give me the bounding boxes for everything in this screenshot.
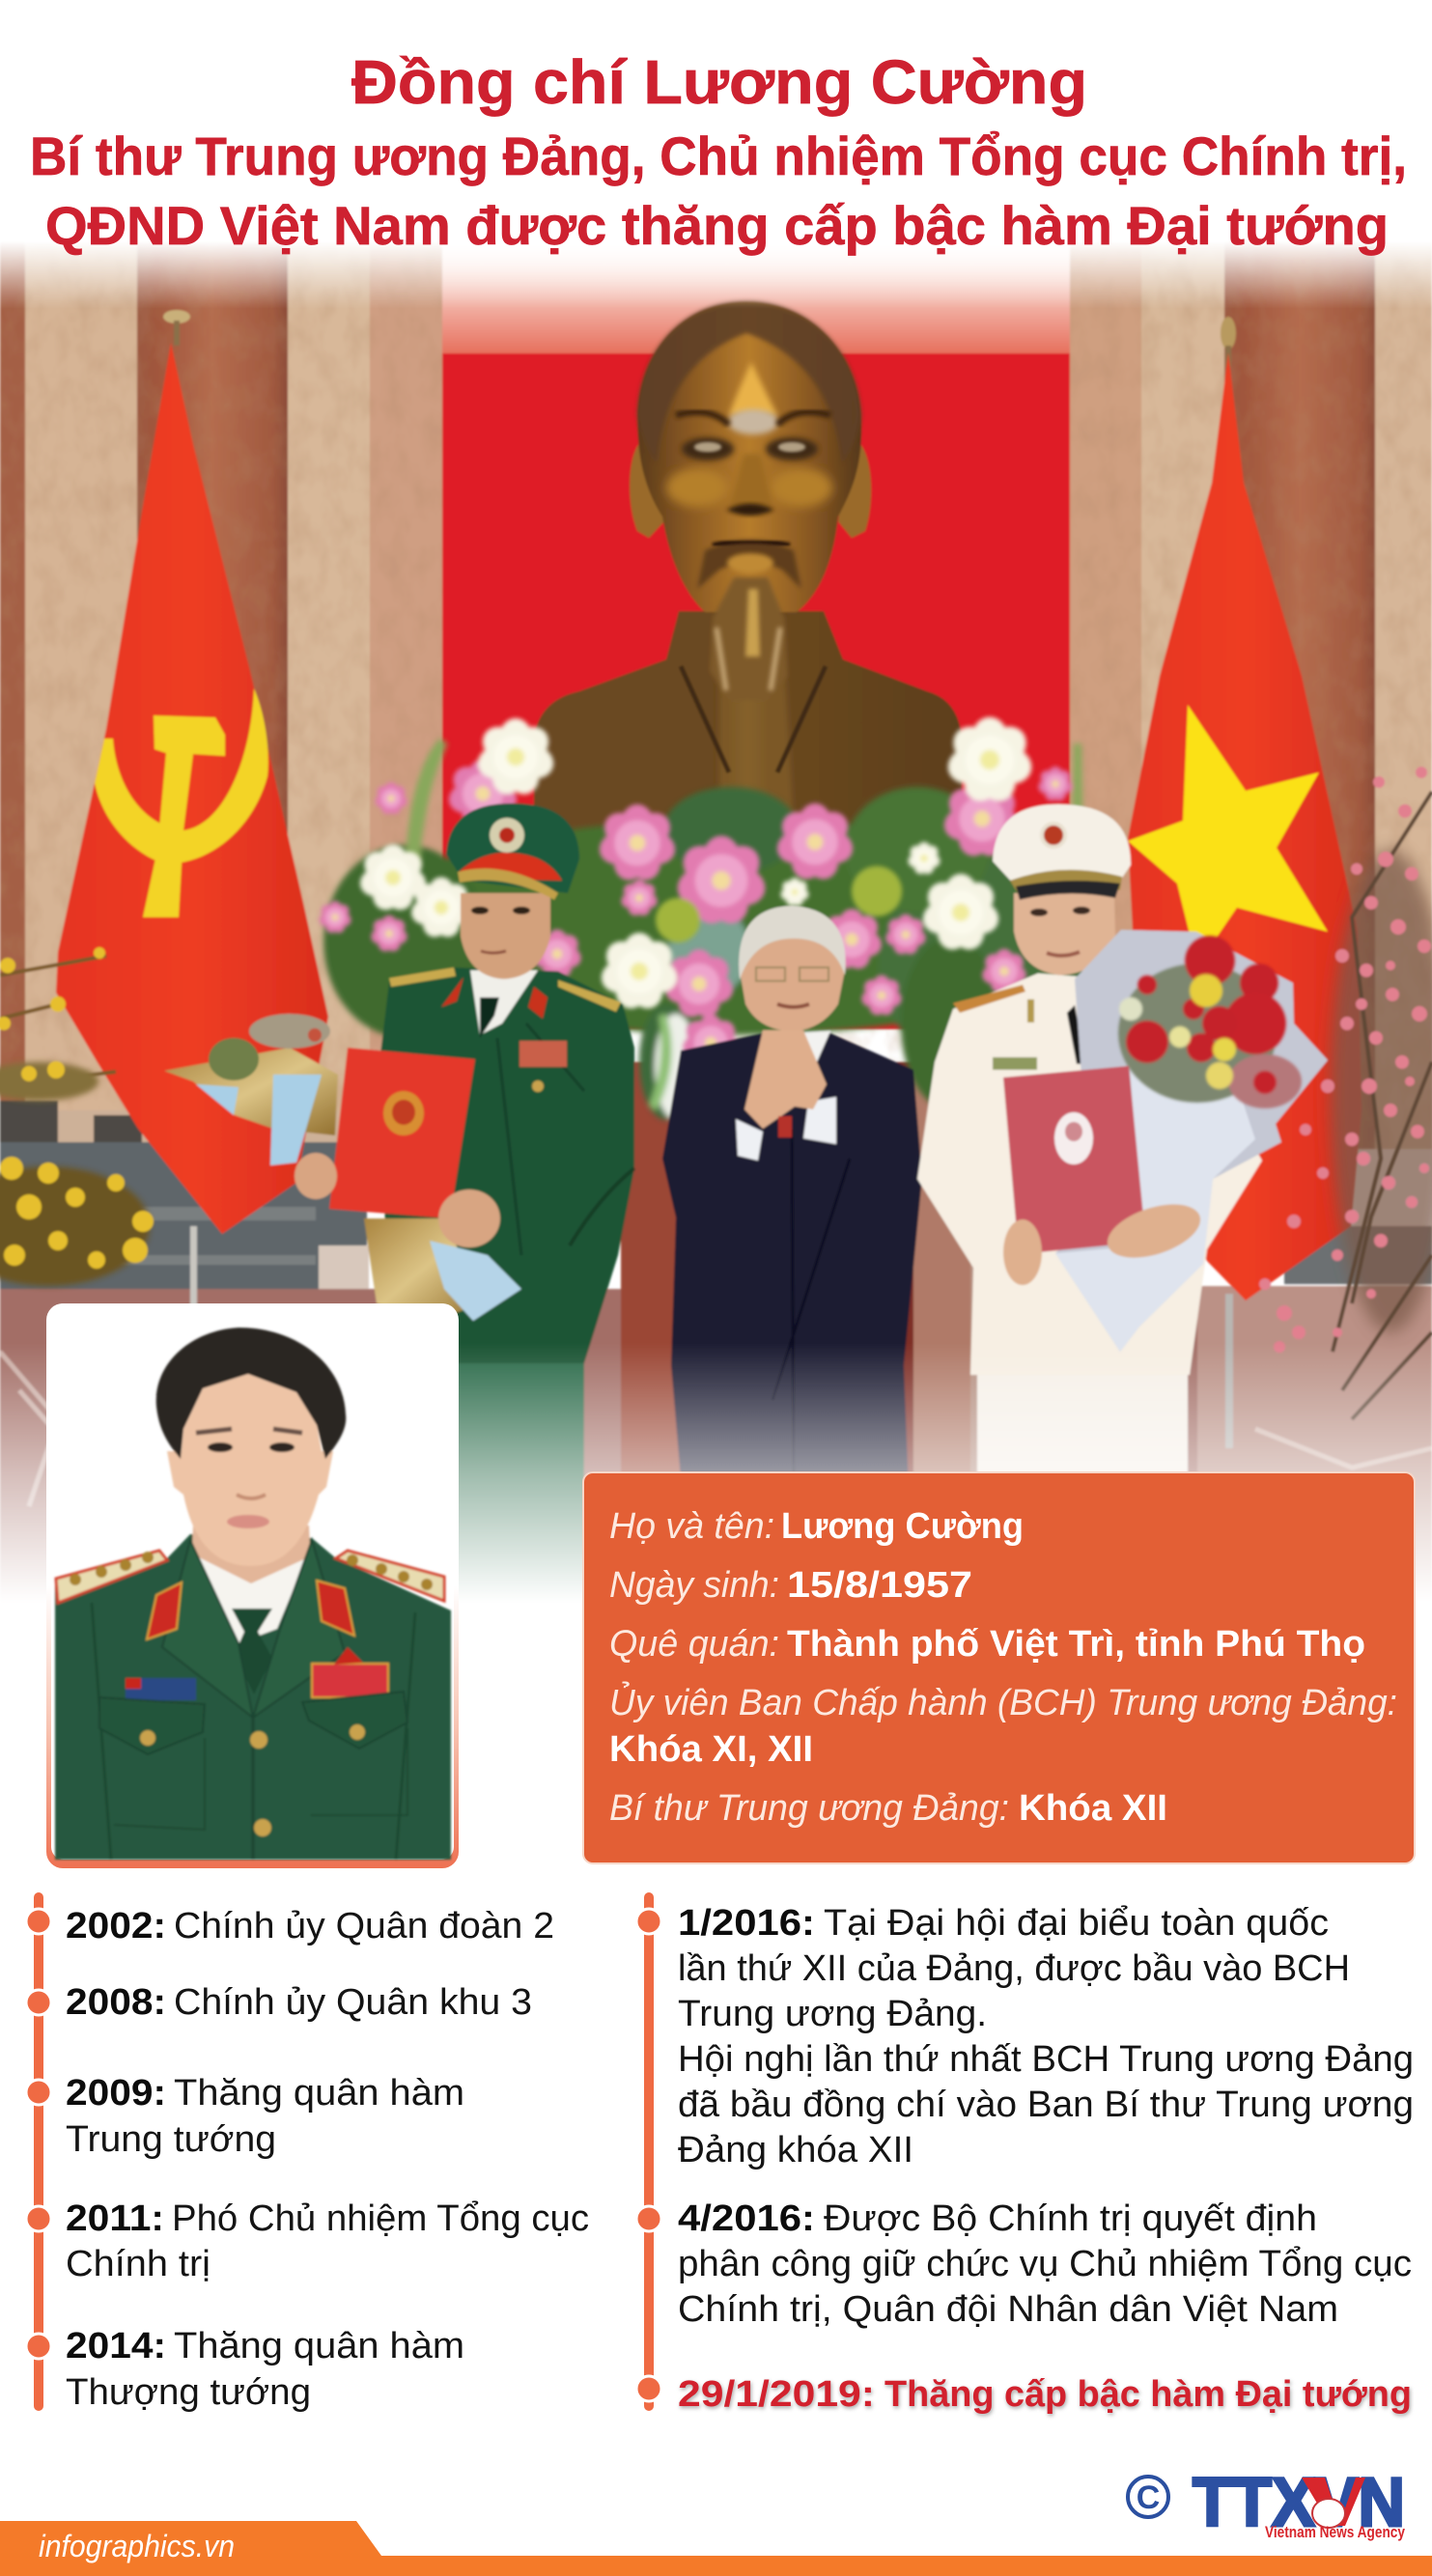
- bronze bust of Ho Chi Minh: [534, 301, 962, 966]
- flag star: [1128, 705, 1328, 966]
- timeline rail: [26, 1892, 51, 2411]
- hammer and sickle: [95, 688, 268, 917]
- portrait of Luong Cuong: [55, 1328, 451, 1860]
- April 2016: phân công giữ chức vụ Chủ nhiệm Tổng cục: [678, 2244, 1412, 2284]
- foliage: [323, 739, 1106, 1120]
- 2009: Trung tướng: [66, 2119, 276, 2160]
- central committee: [609, 1680, 1397, 1770]
- January 2016: Đảng khóa XII: [678, 2130, 913, 2170]
- bottom photo fade: [0, 1342, 1432, 1603]
- general hands: [438, 1190, 500, 1247]
- bouquet paper: [1055, 930, 1328, 1352]
- title: [30, 47, 1407, 256]
- birth date: Ngày sinh:: [609, 1565, 779, 1606]
- hometown: Quê quán:: [609, 1624, 779, 1665]
- general in green uniform: [164, 803, 634, 1603]
- hands: [1101, 1194, 1207, 1268]
- mustache and mouth: [697, 540, 801, 589]
- white jacket: [917, 973, 1262, 1375]
- lotus flowers: [318, 717, 1074, 1074]
- January 2016: Tại Đại hội đại biểu toàn quốc: [824, 1903, 1329, 1944]
- flower arrangement: [318, 717, 1106, 1120]
- red collar tabs: [147, 1582, 182, 1639]
- 2014: Thăng quân hàm: [174, 2326, 464, 2366]
- party flag: [56, 310, 328, 1371]
- TTXVN logo: TTXVN: [1193, 2465, 1405, 2541]
- apricot blossoms left: [0, 947, 154, 1286]
- April 2016: Được Bộ Chính trị quyết định: [824, 2198, 1317, 2239]
- epaulets: [56, 1551, 167, 1603]
- 2009: [66, 2073, 464, 2160]
- brass buttons: [140, 1724, 365, 1836]
- marble texture: [0, 232, 1432, 1149]
- 2011: Phó Chủ nhiệm Tổng cục: [172, 2198, 589, 2239]
- title: Đồng chí Lương Cường: [351, 47, 1087, 117]
- central committee: Khóa XI, XII: [609, 1729, 813, 1770]
- January 2016: Trung ương Đảng.: [678, 1994, 987, 2034]
- January 2019 highlight: 29/1/2019:: [678, 2374, 875, 2415]
- top photo fade: [0, 217, 1432, 309]
- right timeline: [636, 1892, 1414, 2415]
- secretariat: Khóa XII: [1019, 1788, 1167, 1829]
- January 2016: 1/2016:: [678, 1903, 815, 1944]
- ribbon bar and button: [519, 1041, 567, 1067]
- 2011: Chính trị: [66, 2244, 211, 2284]
- army cap: [446, 803, 579, 893]
- red and yellow bouquet flowers: [1118, 936, 1302, 1108]
- uniform: [55, 1534, 451, 1860]
- January 2016: [678, 1903, 1414, 2170]
- neck and face: [191, 1526, 311, 1622]
- 2009: 2009:: [66, 2073, 166, 2114]
- clapping hands: [744, 1030, 827, 1129]
- marble columns right: [1070, 232, 1432, 1149]
- 2008: Chính ủy Quân khu 3: [174, 1982, 532, 2023]
- footer bar: infographics.vn: [39, 2529, 235, 2563]
- trousers: [454, 1352, 584, 1603]
- 2014: 2014:: [66, 2326, 166, 2366]
- 2002: Chính ủy Quân đoàn 2: [174, 1906, 554, 1946]
- 2011: [66, 2198, 589, 2284]
- pink certificate: [1003, 1066, 1145, 1254]
- white shirt cuffs: [736, 1119, 763, 1161]
- January 2019 highlight: Thăng cấp bậc hàm Đại tướng: [884, 2374, 1412, 2415]
- red wall behind bust: [442, 232, 1070, 1029]
- shirt and tie: [470, 970, 538, 1035]
- name: Họ và tên:: [609, 1506, 774, 1547]
- April 2016: 4/2016:: [678, 2198, 815, 2239]
- April 2016: [678, 2198, 1412, 2330]
- secretariat: Bí thư Trung ương Đảng:: [609, 1788, 1009, 1829]
- ribbons, name tag, badge: [312, 1664, 388, 1697]
- copyright mark: [1128, 2477, 1168, 2517]
- footer bar: [0, 2521, 1432, 2576]
- 2014: [66, 2326, 464, 2413]
- name: [609, 1506, 1024, 1547]
- name: Lương Cường: [781, 1506, 1024, 1547]
- 2008: 2008:: [66, 1982, 166, 2023]
- peach blossoms right: [1259, 767, 1432, 1419]
- shirt and tie: [193, 1554, 306, 1643]
- 2014: Thượng tướng: [66, 2372, 311, 2413]
- birth date: [609, 1565, 972, 1606]
- eyes, nose, mouth: [208, 1442, 233, 1452]
- hair: [156, 1328, 346, 1459]
- lapels: [162, 1540, 253, 1718]
- central leader in dark suit: [662, 906, 922, 1482]
- April 2016: Chính trị, Quân đội Nhân dân Việt Nam: [678, 2289, 1338, 2330]
- left timeline: [26, 1892, 589, 2413]
- white hair head: [740, 908, 845, 1031]
- face: [1014, 893, 1115, 975]
- copyright mark: C: [1137, 2479, 1160, 2516]
- trousers: [977, 1361, 1188, 1603]
- 2011: 2011:: [66, 2198, 164, 2239]
- red certificate: [329, 1048, 475, 1218]
- 2002: 2002:: [66, 1906, 166, 1946]
- ceremony photo scene: [0, 232, 1432, 1617]
- hometown: Thành phố Việt Trì, tỉnh Phú Thọ: [787, 1624, 1365, 1665]
- Vietnam national flag: [1128, 317, 1362, 1448]
- bust ears: [630, 441, 664, 538]
- lower stone base and marble floor: [0, 1062, 1432, 1617]
- epaulets and tabs: [389, 967, 456, 987]
- central committee: Ủy viên Ban Chấp hành (BCH) Trung ương Đảng:: [609, 1680, 1397, 1723]
- birth date: 15/8/1957: [787, 1565, 972, 1606]
- January 2016: Hội nghị lần thứ nhất BCH Trung ương Đảng: [678, 2039, 1414, 2080]
- timeline rail: [636, 1892, 661, 2411]
- bust head: [637, 301, 861, 612]
- 2009: Thăng quân hàm: [174, 2073, 464, 2114]
- portrait card: [46, 1303, 459, 1868]
- title: QĐND Việt Nam được thăng cấp bậc hàm Đại tướng: [45, 195, 1389, 256]
- pockets: [99, 1697, 205, 1754]
- marble columns left: [0, 232, 442, 1149]
- green jacket: [379, 967, 634, 1363]
- white cap: [993, 804, 1131, 886]
- goatee: [710, 577, 787, 700]
- police general in white uniform: [917, 804, 1328, 1603]
- bouquet: [164, 1048, 338, 1135]
- face: [461, 893, 550, 979]
- January 2016: đã bầu đồng chí vào Ban Bí thư Trung ương: [678, 2085, 1414, 2125]
- info panel: [583, 1472, 1415, 1863]
- January 2016: lần thứ XII của Đảng, được bầu vào BCH: [678, 1948, 1350, 1989]
